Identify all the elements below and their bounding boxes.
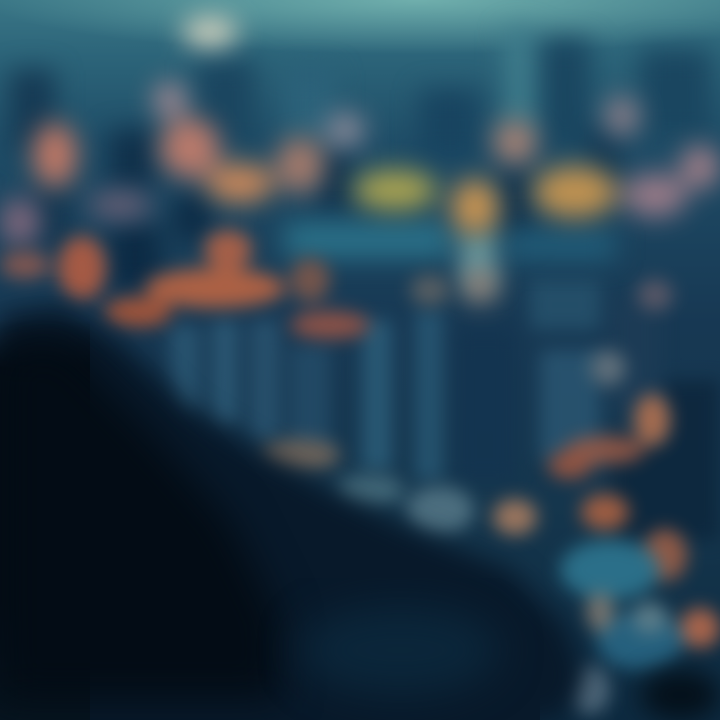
distant towers xyxy=(10,30,710,290)
dark lower-right corner xyxy=(640,670,720,720)
right side and lower lights xyxy=(260,279,720,714)
orange lights band xyxy=(0,230,450,339)
dark foreground hillside xyxy=(0,306,585,720)
warm window lights, upper row xyxy=(0,17,720,303)
lower tower columns xyxy=(170,280,720,540)
teal horizontal band xyxy=(285,222,615,285)
